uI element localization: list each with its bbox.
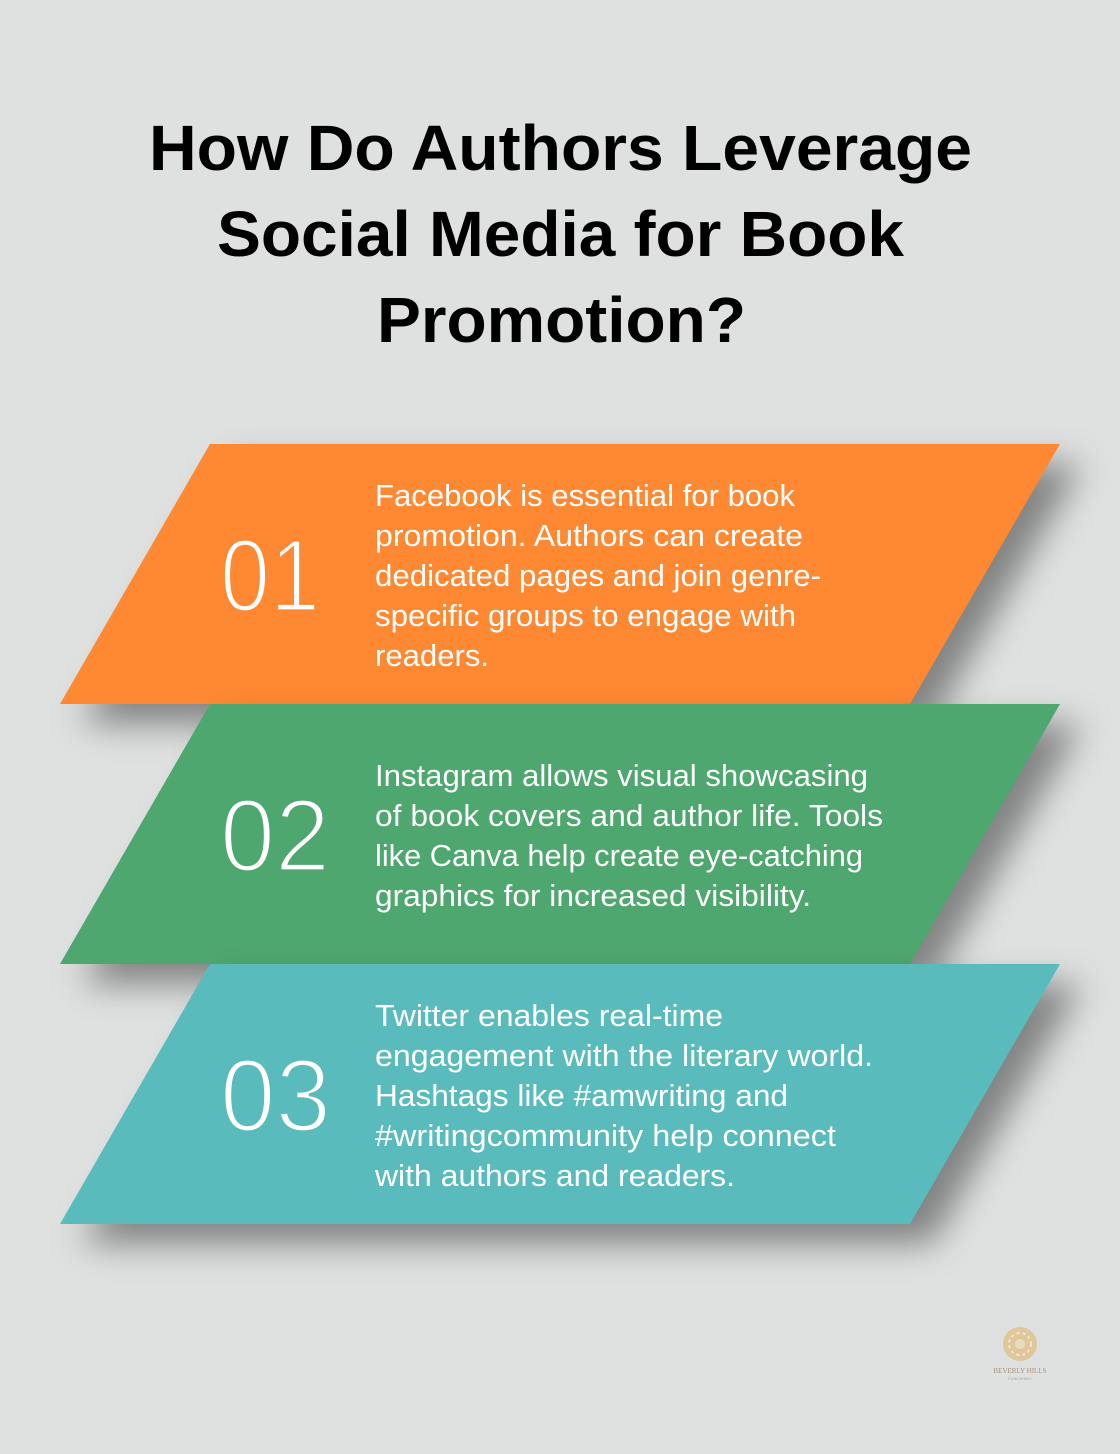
panel: step 03 Twitter: #writingcommunity help connect [375,1119,837,1153]
panel: step 01 Facebook: Facebook is essential for book [375,479,796,513]
panel: step 01 Facebook: readers. [375,639,489,673]
panel: step 01 Facebook: 01 [220,518,320,633]
title: Social Media for Book [217,198,904,270]
logo: Beverly Hills Publishing: BEVERLY HILLS [994,1367,1047,1375]
panel: step 03 Twitter: Twitter enables real-time [375,999,723,1033]
panel: step 01 Facebook: specific groups to engage with [375,599,796,633]
panel: step 02 Instagram: 02 [220,778,330,893]
title: Promotion? [377,284,746,356]
logo: Beverly Hills Publishing: PUBLISHING [1008,1376,1032,1381]
title [149,112,972,356]
panel: step 01 Facebook: dedicated pages and join genre- [375,559,821,593]
panel: step 01 Facebook: promotion. Authors can create [375,519,803,553]
panel: step 02 Instagram: of book covers and author life. Tools [375,799,883,833]
panel: step 01 Facebook [60,444,1082,724]
logo: Beverly Hills Publishing [994,1327,1047,1381]
panel: step 03 Twitter: with authors and readers. [374,1159,735,1193]
panel: step 02 Instagram: Instagram allows visual showcasing [375,759,868,793]
panel: step 03 Twitter: 03 [220,1038,331,1153]
panel: step 03 Twitter: engagement with the literary world. [375,1039,873,1073]
panel: step 02 Instagram [60,704,1082,984]
panel: step 02 Instagram: like Canva help create eye-catching [375,839,863,873]
panel: step 03 Twitter: Hashtags like #amwriting and [375,1079,788,1113]
panel: step 02 Instagram: graphics for increased visibility. [375,879,811,913]
panel: step 03 Twitter [60,964,1082,1244]
title: How Do Authors Leverage [149,112,972,184]
